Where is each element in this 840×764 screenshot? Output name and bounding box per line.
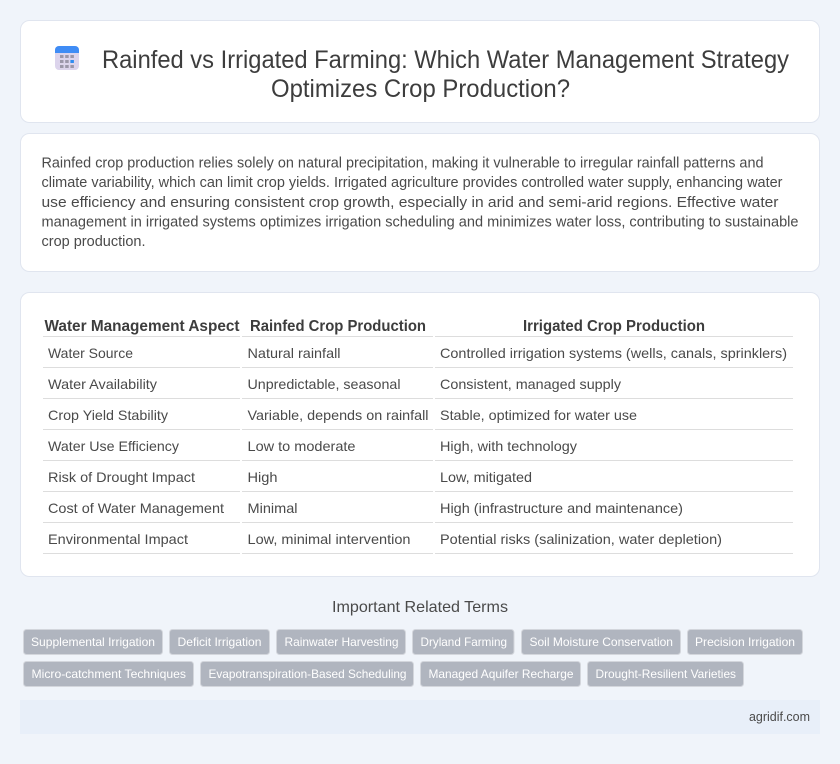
footer source text: agridif.com (749, 709, 810, 724)
heading: important related terms: Important Related Terms (332, 599, 508, 616)
table row: water source: Natural rainfall (248, 345, 340, 361)
chip: rainwater harvesting: Rainwater Harvesting (284, 635, 398, 649)
panel: intro paragraph (20, 134, 820, 272)
table row: water use efficiency: Low to moderate (248, 438, 356, 454)
table row: crop yield stability (48, 407, 637, 423)
title: Rainfed vs Irrigated Farming: Which Water Management Strategy (102, 46, 789, 74)
chip: managed aquifer recharge: Managed Aquifer Recharge (428, 667, 574, 681)
table row: crop yield stability: Variable, depends on rainfall (248, 407, 428, 423)
table row: cost of water management (48, 500, 683, 516)
table row: water use efficiency: High, with technology (440, 438, 577, 454)
chip: soil moisture conservation: Soil Moisture Conservation (530, 635, 673, 649)
related term chips (24, 630, 802, 686)
footer bar (20, 700, 820, 734)
table row: water use efficiency: Water Use Efficiency (48, 438, 179, 454)
text block: intro: climate variability, which can limit crop yields. Irrigated agriculture provides controlled water supply, enhancing water (42, 175, 783, 191)
table row: water use efficiency (48, 438, 577, 454)
chip: rainwater harvesting (276, 630, 406, 654)
text block: intro: Rainfed crop production relies solely on natural precipitation, making it vulnerable to irregular rainfall patterns and (42, 156, 764, 172)
table row: environmental impact: Low, minimal intervention (248, 531, 410, 547)
text block: intro (42, 156, 798, 250)
chip: evapotranspiration-based scheduling (200, 662, 414, 686)
table row: cost of water management: Minimal (248, 500, 298, 516)
table row: environmental impact: Potential risks (salinization, water depletion) (440, 531, 722, 547)
chip: supplemental irrigation (24, 630, 162, 654)
table row: water availability: Water Availability (48, 376, 157, 392)
table row: water source: Water Source (48, 345, 133, 361)
table row: environmental impact: Environmental Impact (48, 531, 188, 547)
table row: water source: Controlled irrigation systems (wells, canals, sprinklers) (440, 345, 787, 361)
table row: risk of drought impact: Risk of Drought Impact (48, 469, 195, 485)
panel: title header (20, 20, 820, 122)
table row: risk of drought impact (48, 469, 532, 485)
chip: drought-resilient varieties: Drought-Resilient Varieties (596, 667, 736, 681)
chip: deficit irrigation: Deficit Irrigation (178, 635, 262, 649)
chip: soil moisture conservation (522, 630, 680, 654)
table row: cost of water management: Cost of Water Management (48, 500, 224, 516)
chip: micro-catchment techniques (24, 662, 194, 686)
table row: risk of drought impact: Low, mitigated (440, 469, 532, 485)
table row: environmental impact (48, 531, 722, 547)
table row: risk of drought impact: High (248, 469, 278, 485)
table row: crop yield stability: Crop Yield Stability (48, 407, 168, 423)
title (102, 46, 789, 103)
chip: precision irrigation (688, 630, 802, 654)
table row: water availability: Unpredictable, seasonal (248, 376, 400, 392)
table row: water source (48, 345, 787, 361)
table header: Rainfed Crop Production (250, 318, 426, 335)
chip: deficit irrigation (170, 630, 270, 654)
chip: precision irrigation: Precision Irrigation (695, 635, 795, 649)
table row: water availability: Consistent, managed supply (440, 376, 621, 392)
chip: micro-catchment techniques: Micro-catchment Techniques (32, 667, 186, 681)
title: Optimizes Crop Production? (271, 75, 570, 103)
chip: supplemental irrigation: Supplemental Irrigation (31, 635, 155, 649)
table header: Irrigated Crop Production (523, 318, 705, 335)
text block: intro: use efficiency and ensuring consistent crop growth, especially in arid and semi-arid regions. Effective water (42, 195, 779, 211)
table row: water availability (48, 376, 621, 392)
chip: dryland farming (412, 630, 514, 654)
panel: comparison table (20, 292, 820, 576)
text block: intro: management in irrigated systems optimizes irrigation scheduling and minimizes water loss, contributing to sustainable (42, 214, 798, 230)
table header: Water Management Aspect (44, 318, 240, 335)
text block: intro: crop production. (42, 234, 146, 250)
chip: dryland farming: Dryland Farming (420, 635, 507, 649)
chip: evapotranspiration-based scheduling: Evapotranspiration-Based Scheduling (208, 667, 406, 681)
table row: crop yield stability: Stable, optimized for water use (440, 407, 637, 423)
chip: drought-resilient varieties (588, 662, 744, 686)
icon: calendar grid (55, 46, 79, 70)
table header (44, 318, 705, 335)
table row: cost of water management: High (infrastructure and maintenance) (440, 500, 683, 516)
chip: managed aquifer recharge (420, 662, 580, 686)
